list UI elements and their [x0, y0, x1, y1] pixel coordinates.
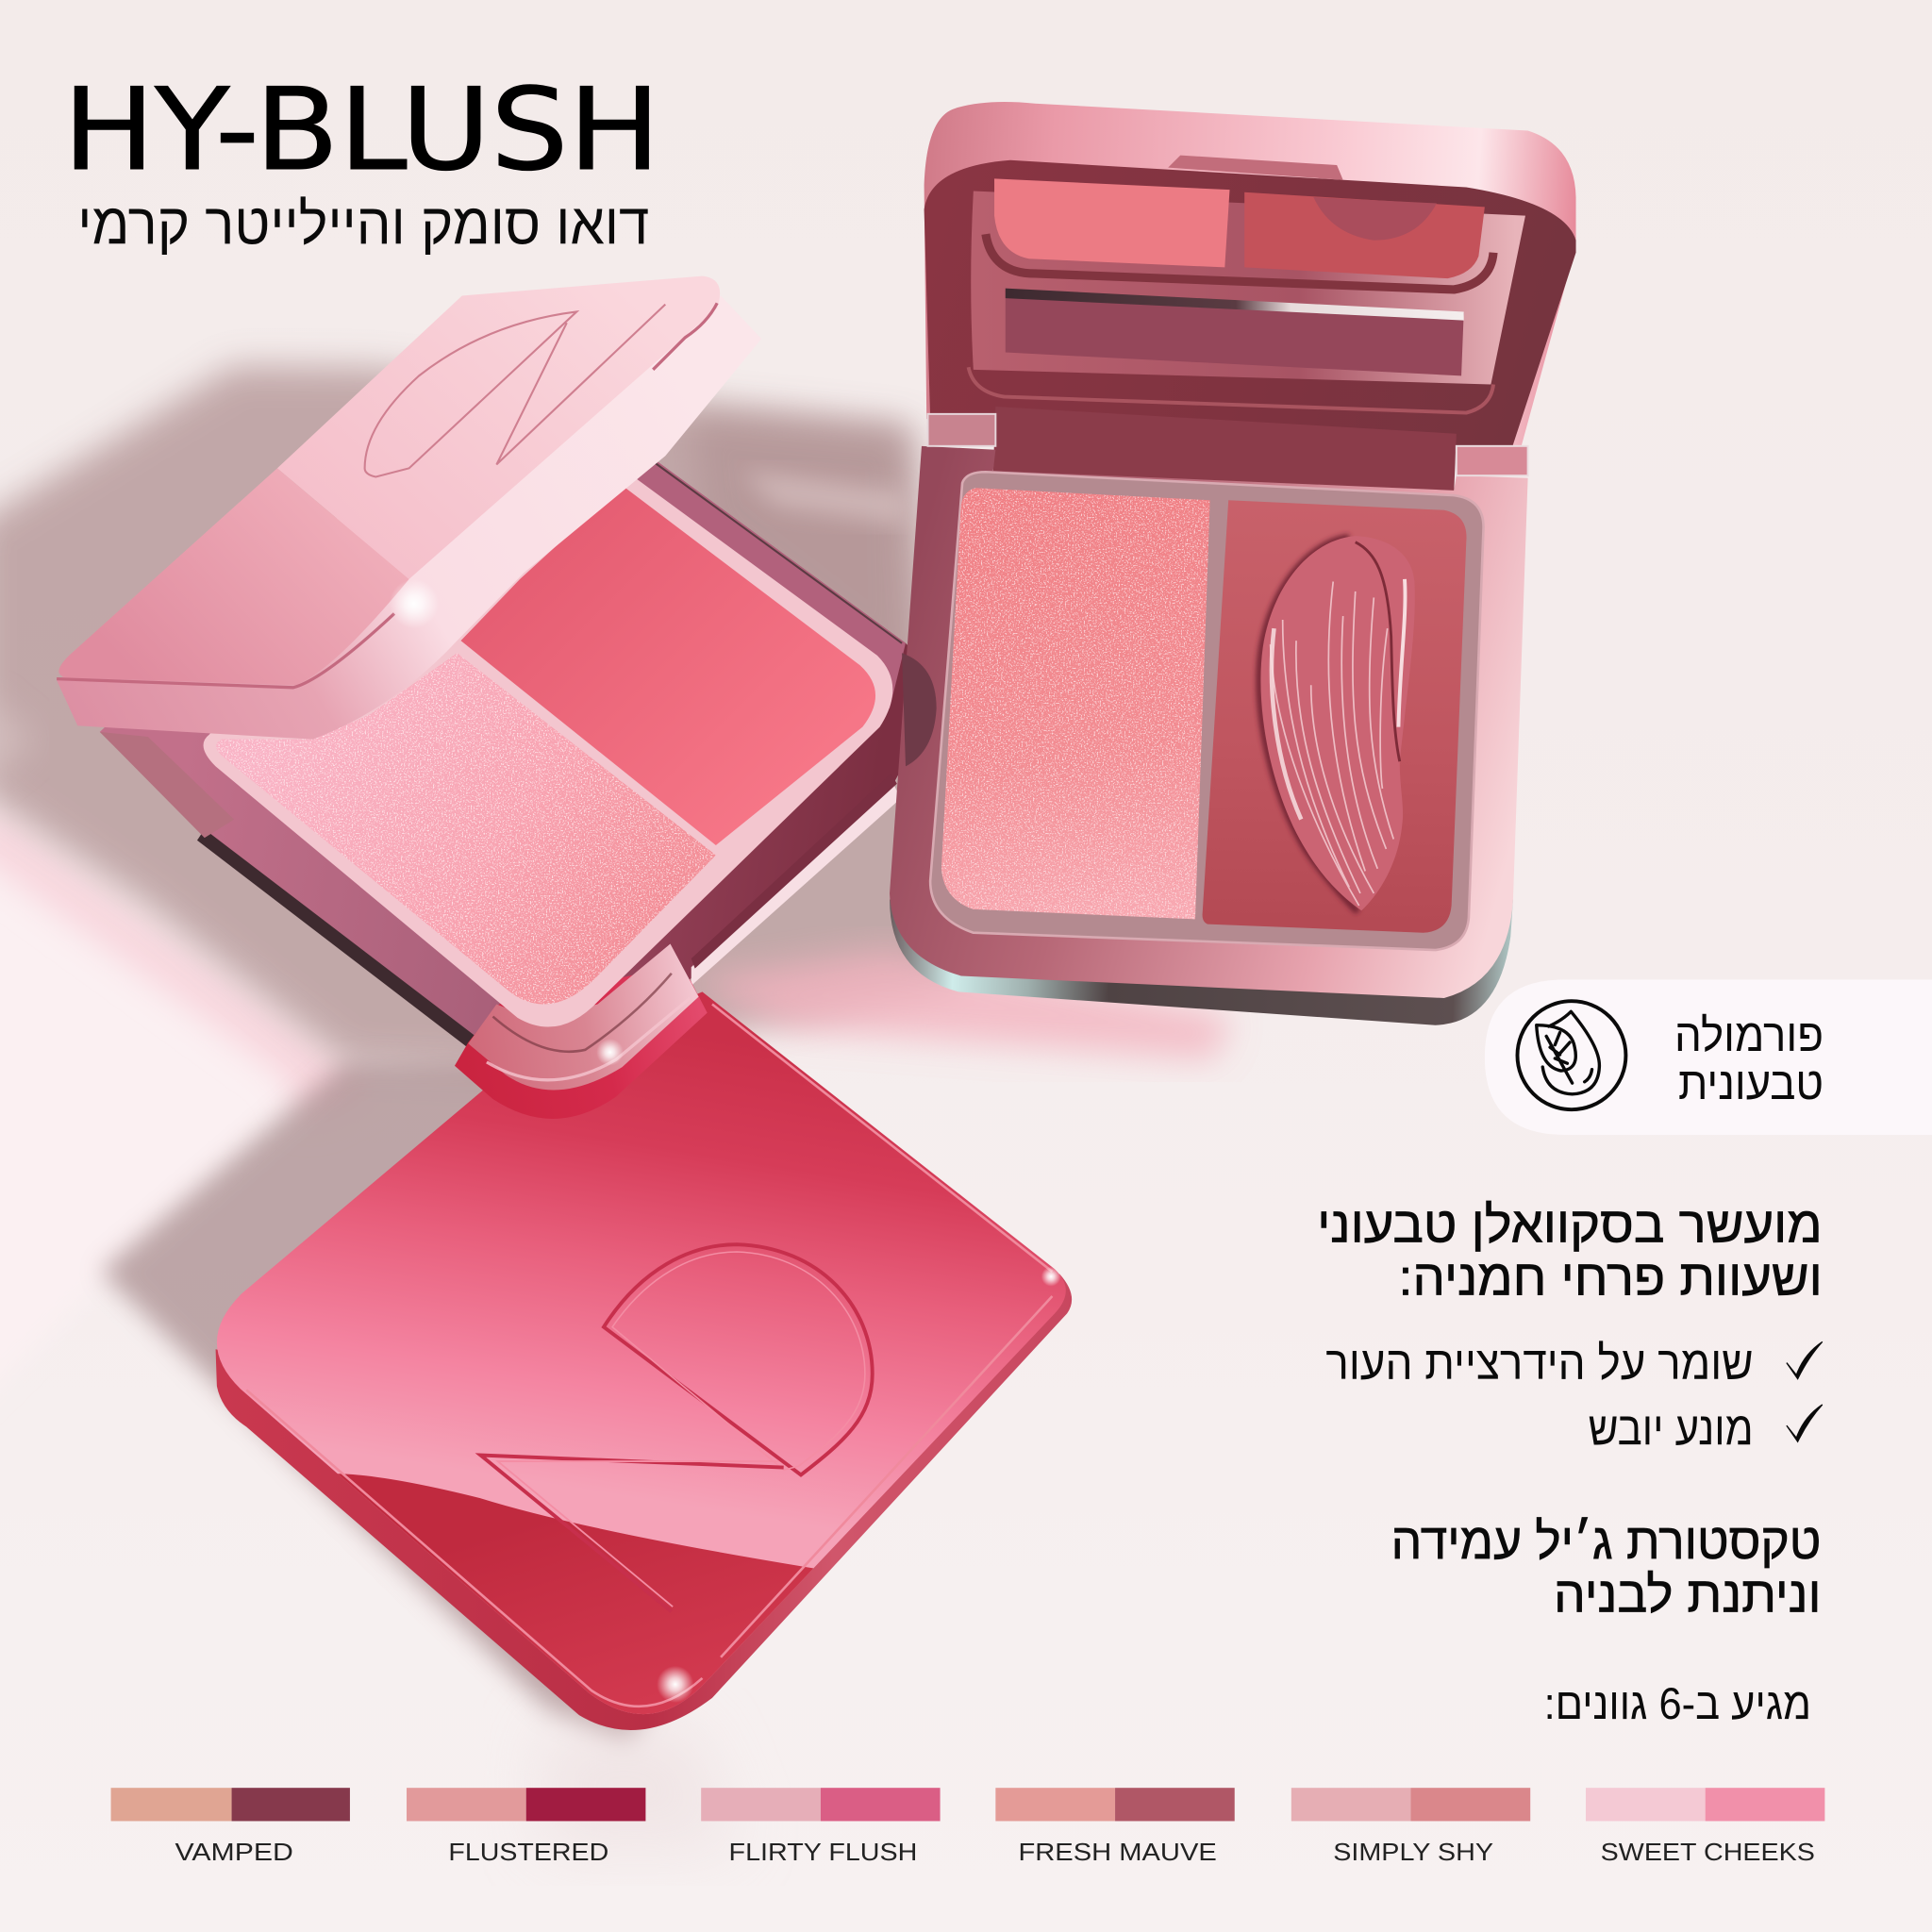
- highlighter pan: [216, 653, 716, 1004]
- icon: check: [1787, 1341, 1823, 1379]
- cast shadows on the background: [0, 366, 1232, 1848]
- mirror reflection: left pan: [994, 178, 1230, 267]
- badge: natural formula: [1485, 979, 1932, 1135]
- shade: sweet cheeks: [1586, 1788, 1824, 1866]
- shades intro: מגיע ב-6 גוונים:: [1544, 1678, 1811, 1728]
- shade: vamped: [111, 1788, 350, 1866]
- shade: fresh mauve: [995, 1788, 1235, 1866]
- glint: [390, 579, 439, 628]
- shade: vamped: VAMPED: [175, 1838, 293, 1866]
- glint: [657, 1666, 693, 1703]
- lid outer band: [924, 102, 1576, 458]
- heading: gel texture: [1391, 1514, 1821, 1623]
- glass corner over red compact: [455, 974, 708, 1119]
- left highlighter pan: [941, 488, 1210, 919]
- lid inner frame: [924, 160, 1576, 456]
- heading: enriched with squalane and sunflower wax: [1317, 1198, 1823, 1307]
- left compact corner seen through glass: [902, 653, 937, 766]
- coral blush pan: [460, 486, 875, 845]
- badge pill: [1485, 979, 1932, 1135]
- benefit 2: מונע יובש: [1589, 1402, 1754, 1455]
- heading: gel texture: טקסטורת ג׳יל עמידה: [1391, 1514, 1821, 1570]
- hinge left: [928, 414, 995, 446]
- embossed 2N logo: [365, 305, 665, 476]
- shade: simply shy: SIMPLY SHY: [1333, 1838, 1493, 1866]
- heading: gel texture: וניתנת לבניה: [1554, 1567, 1821, 1623]
- lid tab: [1168, 156, 1343, 180]
- base face: [890, 446, 1528, 998]
- dark lower edge: [197, 829, 475, 1050]
- mirror reflection: tray line: [986, 234, 1493, 290]
- shade: flirty flush: [701, 1788, 941, 1866]
- hinge band: [993, 407, 1457, 492]
- bottom glass edge: [890, 899, 1513, 1025]
- lid top surface, darker part: [58, 468, 409, 685]
- pale glass strip: [691, 778, 901, 986]
- badge: natural formula: טבעונית: [1678, 1058, 1824, 1109]
- left compact lid: [57, 276, 761, 740]
- right open compact: [890, 102, 1576, 1025]
- shade: flustered: [407, 1788, 645, 1866]
- shade: simply shy: [1291, 1788, 1530, 1866]
- lid side wall: [57, 295, 761, 740]
- bright rim lines: [246, 1004, 1052, 1707]
- badge text: פורמולה: [1674, 1010, 1824, 1061]
- hinge right: [1457, 446, 1528, 475]
- pan tray: [930, 472, 1484, 950]
- benefit list: [1325, 1337, 1823, 1455]
- heading: enriched with squalane and sunflower wax: מועשר בסקוואלן טבעוני: [1317, 1198, 1823, 1254]
- compact top surface: [217, 991, 1066, 1714]
- mirror reflection: right pan: [1244, 192, 1485, 278]
- icon: check: [1787, 1405, 1823, 1441]
- lower dark reflection: [338, 1474, 813, 1714]
- red closed compact: [197, 991, 1072, 1750]
- shade swatches: [111, 1788, 1824, 1866]
- embossed 2N logo: [480, 1244, 873, 1611]
- benefit 1: שומר על הידרציית העור: [1325, 1337, 1754, 1390]
- lid top surface, light part: [277, 276, 720, 579]
- mirror: [971, 191, 1525, 385]
- cream swatch: [1259, 536, 1415, 912]
- heading: enriched with squalane and sunflower wax: ושעוות פרחי חמניה:: [1398, 1251, 1823, 1307]
- shade: flirty flush: FLIRTY FLUSH: [729, 1838, 917, 1866]
- metallic rim: [57, 303, 717, 688]
- shade: flustered: FLUSTERED: [448, 1838, 608, 1866]
- right blush pan: [1203, 500, 1467, 933]
- mirror reflection: strip: [1006, 291, 1464, 375]
- top right rim of base: [632, 458, 906, 708]
- glass left corner: [100, 732, 234, 838]
- compact side wall: [216, 1274, 1072, 1730]
- shade: fresh mauve: FRESH MAUVE: [1019, 1838, 1217, 1866]
- left open compact: base: [100, 458, 928, 1119]
- mirror reflection: swatch: [1313, 197, 1437, 241]
- mirror lower rim: [969, 367, 1493, 413]
- shade: sweet cheeks: SWEET CHEEKS: [1601, 1838, 1815, 1866]
- icon: leaf and drop: [1517, 1001, 1625, 1109]
- title: HY-BLUSH: [63, 64, 660, 196]
- pan tray: [204, 475, 892, 1027]
- subtitle: דואו סומק והיילייטר קרמי: [77, 192, 649, 258]
- base case: [100, 458, 928, 1047]
